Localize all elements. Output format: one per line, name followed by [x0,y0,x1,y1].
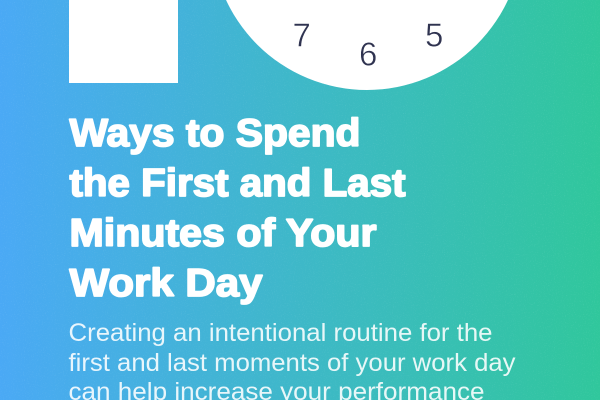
clock numeral 5: 5 [425,16,443,54]
intro paragraph [68,319,516,400]
clock numeral 7: 7 [292,16,311,54]
clock numeral 6: 6 [359,36,377,72]
title: the First and Last [70,162,406,205]
white square panel [69,0,178,83]
title: Ways to Spend [70,112,360,155]
clock face [212,0,522,90]
title [70,112,406,305]
title: Minutes of Your [70,212,376,255]
intro paragraph: Creating an intentional routine for the [68,319,492,347]
title: Work Day [70,262,263,305]
intro paragraph: first and last moments of your work day [68,349,516,377]
